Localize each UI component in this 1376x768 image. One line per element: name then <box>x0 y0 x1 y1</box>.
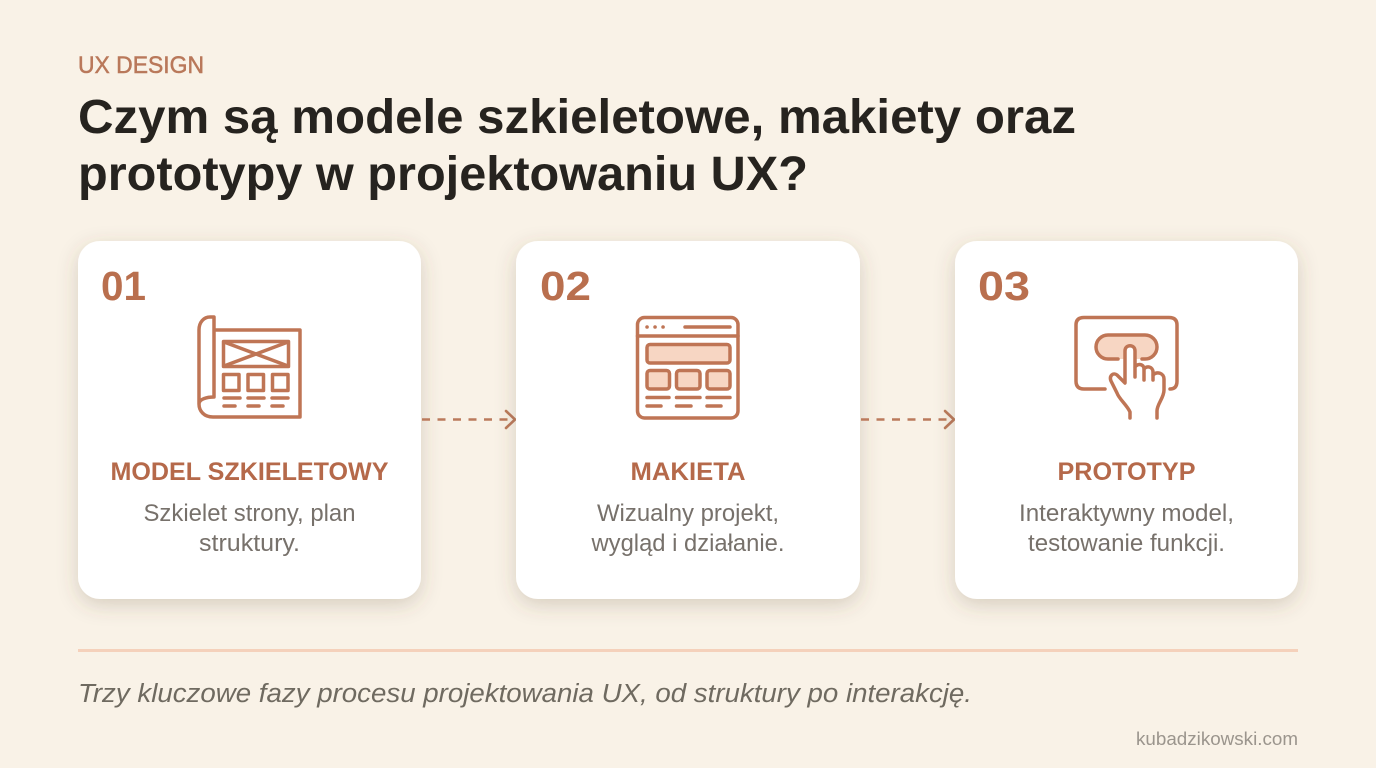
description: prototyp: Interaktywny model, <box>1019 500 1234 527</box>
heading: makieta: MAKIETA <box>630 458 746 486</box>
heading: model szkieletowy: MODEL SZKIELETOWY <box>110 458 389 486</box>
title: Czym są modele szkieletowe, makiety oraz <box>78 90 1076 144</box>
description: prototyp: testowanie funkcji. <box>1028 530 1225 557</box>
eyebrow: UX DESIGN: UX DESIGN <box>78 52 204 79</box>
arrow: step 2 to 3 <box>861 411 954 428</box>
description: makieta: wygląd i działanie. <box>591 530 784 557</box>
number 03: 03 <box>978 263 1030 309</box>
icon: browser mockup <box>638 318 738 418</box>
source credit: kubadzikowski.com <box>1136 729 1298 749</box>
heading: prototyp: PROTOTYP <box>1058 458 1196 486</box>
arrow: step 1 to 2 <box>422 411 515 428</box>
description: model szkieletowy: Szkielet strony, plan <box>144 500 356 527</box>
title: prototypy w projektowaniu UX? <box>78 147 808 201</box>
title <box>78 90 1076 201</box>
panel: model szkieletowy <box>78 241 421 599</box>
description: prototyp <box>1019 500 1234 557</box>
icon: finger tapping button <box>1076 318 1177 418</box>
panel: makieta <box>516 241 860 599</box>
number 02: 02 <box>540 263 591 309</box>
number 01: 01 <box>101 263 146 309</box>
summary caption: Trzy kluczowe fazy procesu projektowania UX, od struktury po interakcję. <box>78 680 972 708</box>
icon: wireframe blueprint <box>199 317 300 417</box>
description: makieta <box>591 500 784 557</box>
description: model szkieletowy: struktury. <box>199 530 300 557</box>
description: makieta: Wizualny projekt, <box>597 500 779 527</box>
description: model szkieletowy <box>144 500 356 557</box>
panel: prototyp <box>955 241 1298 599</box>
